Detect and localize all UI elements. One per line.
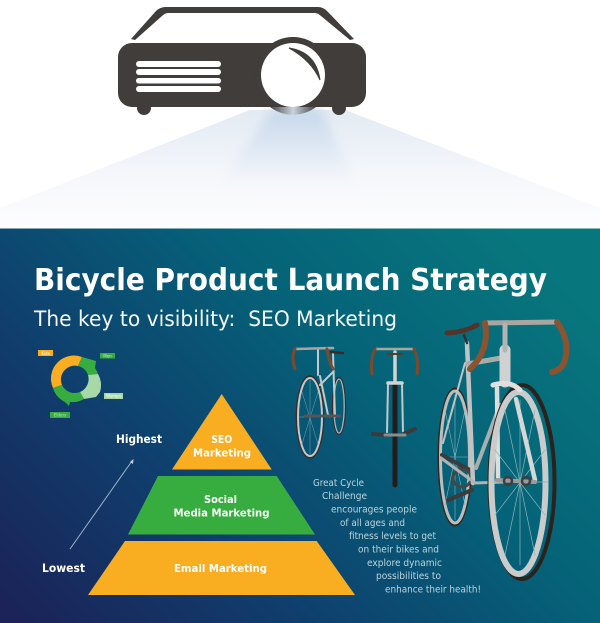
pyramid tier: SEO Marketing: Marketing — [193, 446, 251, 460]
legend: men — [100, 353, 115, 358]
label: Lowest: Lowest — [42, 561, 85, 575]
pyramid tier: Social Media Marketing — [128, 476, 315, 534]
text block: Great Cycle Challenge: possibilities to — [376, 571, 441, 582]
text block: Great Cycle Challenge: enhance their health! — [385, 584, 481, 596]
text block: Great Cycle Challenge — [313, 478, 481, 596]
front wheel — [490, 383, 554, 579]
donut segment: men — [78, 357, 98, 375]
bicycle: small three-quarter view — [293, 348, 346, 458]
pyramid tier: SEO Marketing: SEO — [211, 433, 232, 446]
text block: Great Cycle Challenge: Challenge — [322, 491, 367, 502]
text block: Great Cycle Challenge: Great Cycle — [313, 478, 364, 489]
donut chart — [51, 356, 101, 406]
pyramid tier: Email Marketing: Email Marketing — [174, 562, 267, 575]
bicycle: small front view — [371, 349, 418, 485]
donut segment: kids — [51, 356, 82, 388]
legend: men: Men — [103, 354, 112, 358]
rear wheel — [438, 388, 472, 526]
pyramid tier: Social Media Marketing: Media Marketing — [174, 506, 270, 520]
subtitle: The key to visibility: SEO Marketing — [33, 307, 397, 331]
legend: kids — [38, 350, 53, 356]
pyramid tier: Social Media Marketing: Social — [204, 493, 237, 506]
legend: women — [104, 393, 123, 399]
bicycle: large three-quarter view — [438, 322, 566, 579]
text block: Great Cycle Challenge: explore dynamic — [367, 558, 442, 569]
frame — [441, 343, 505, 483]
text block: Great Cycle Challenge: of all ages and — [340, 518, 405, 529]
panel: slide background — [0, 228, 600, 623]
handlebar and saddle — [447, 322, 566, 372]
label: Highest: Highest — [116, 432, 162, 446]
legend: elders — [50, 412, 70, 418]
legend: women: Women — [106, 394, 121, 398]
donut segment: elders — [53, 385, 84, 406]
text block: Great Cycle Challenge: fitness levels to get — [349, 531, 436, 542]
pyramid chart — [88, 394, 355, 595]
pyramid tier: Email Marketing — [88, 541, 355, 595]
text block: Great Cycle Challenge: on their bikes and — [358, 544, 439, 556]
legend: elders: Elders — [54, 412, 66, 418]
arrow: lowest to highest — [70, 459, 134, 549]
projector light beam — [0, 108, 600, 229]
pyramid tier: SEO Marketing — [172, 394, 272, 470]
text block: Great Cycle Challenge: encourages people — [331, 504, 417, 516]
legend: kids: Kids — [41, 351, 50, 356]
donut segment: women — [80, 374, 101, 399]
title: Bicycle Product Launch Strategy — [34, 263, 547, 298]
icon: projector — [118, 7, 366, 115]
